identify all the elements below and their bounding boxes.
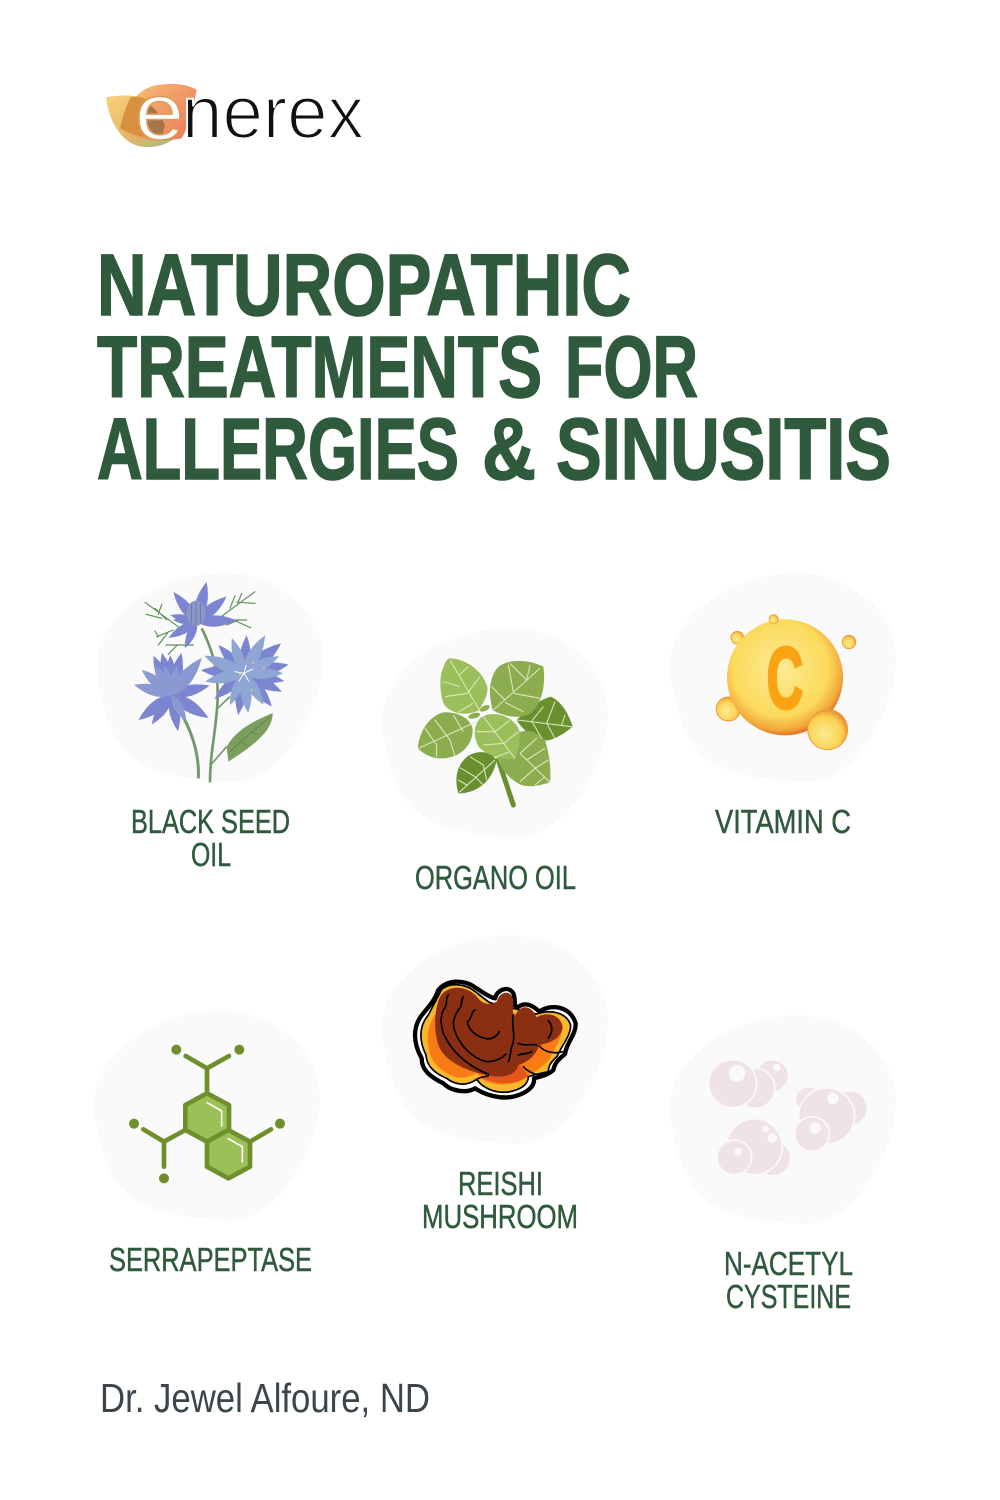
icon: reishi mushroom (415, 982, 576, 1097)
title: TREATMENTS (97, 319, 542, 416)
icon: vitamin c capsule (716, 615, 856, 750)
author credit: Dr. Jewel Alfoure, ND (100, 1375, 430, 1421)
logo: enerex (106, 67, 364, 156)
panel: vitamin c (670, 573, 896, 840)
icon: nigella flower (133, 580, 290, 782)
label: n-acetyl cysteine: N-ACETYL (724, 1245, 853, 1282)
title (97, 237, 891, 498)
logo: enerex: nerex (182, 71, 364, 154)
panel: n-acetyl cysteine (670, 1015, 896, 1315)
icon: pink molecules (709, 1060, 867, 1175)
label: black seed oil: OIL (191, 836, 231, 873)
title: ALLERGIES (97, 401, 459, 498)
panel: black seed oil (97, 573, 323, 873)
title: & (482, 401, 536, 498)
icon: oregano leaves (418, 658, 573, 805)
title: NATUROPATHIC (97, 237, 631, 334)
label: serrapeptase: SERRAPEPTASE (109, 1241, 312, 1278)
title: SINUSITIS (556, 401, 891, 498)
title: FOR (565, 319, 698, 416)
label: n-acetyl cysteine: CYSTEINE (726, 1278, 851, 1315)
label: black seed oil: BLACK SEED (131, 803, 290, 840)
label: n-acetyl cysteine (724, 1245, 853, 1315)
logo: enerex: e (135, 67, 184, 156)
label: reishi mushroom: REISHI (458, 1165, 543, 1202)
panel: serrapeptase (94, 1011, 320, 1278)
panel: organo oil (382, 628, 608, 896)
label: reishi mushroom (422, 1165, 578, 1235)
icon: vitamin c capsule: C (767, 629, 803, 727)
panel: reishi mushroom (382, 935, 608, 1235)
label: vitamin c: VITAMIN C (715, 803, 851, 840)
label: organo oil: ORGANO OIL (415, 859, 576, 896)
label: black seed oil (131, 803, 290, 873)
icon: molecule (129, 1045, 285, 1183)
label: reishi mushroom: MUSHROOM (422, 1198, 578, 1235)
